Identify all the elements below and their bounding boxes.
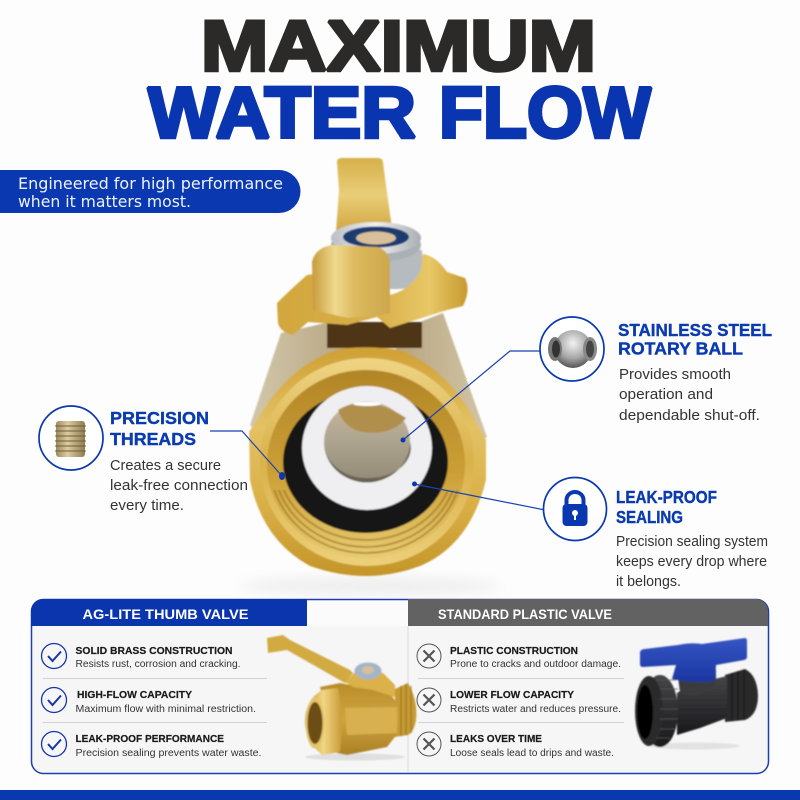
heading <box>110 408 209 449</box>
callout: stainless steel rotary ball <box>540 317 772 424</box>
header <box>408 599 768 626</box>
valve lever handle <box>336 158 392 232</box>
body <box>677 676 727 735</box>
description <box>619 366 760 424</box>
thumb block <box>312 245 390 318</box>
tagline pill: Engineered for high performance <box>18 174 283 193</box>
header: STANDARD PLASTIC VALVE <box>438 606 612 622</box>
row: plastic construction <box>417 644 621 670</box>
row: leaks: Loose seals lead to drips and waste. <box>450 748 614 759</box>
row: leak proof: LEAK-PROOF PERFORMANCE <box>76 733 224 745</box>
description: Precision sealing system <box>616 533 768 550</box>
title line: water flow: WATER <box>148 74 416 154</box>
tagline pill <box>0 170 300 213</box>
header: AG-LITE THUMB VALVE <box>82 606 248 622</box>
plastic valve product image <box>635 638 758 750</box>
title line: water flow <box>148 74 651 154</box>
row: lower flow <box>417 688 621 715</box>
description: dependable shut-off. <box>619 407 760 424</box>
row: high flow: HIGH-FLOW CAPACITY <box>77 689 192 701</box>
header <box>31 599 307 626</box>
description: it belongs. <box>616 573 681 590</box>
front threaded port <box>249 347 486 576</box>
description: keeps every drop where <box>616 553 767 570</box>
male thread end <box>725 669 758 722</box>
tagline pill: when it matters most. <box>18 192 191 211</box>
icon: threaded nipple <box>39 406 103 470</box>
icon: x <box>417 688 441 712</box>
row: plastic construction: PLASTIC CONSTRUCTION <box>450 645 578 657</box>
heading: LEAK-PROOF <box>616 487 717 507</box>
icon: steel ball <box>540 317 604 381</box>
description <box>616 533 768 590</box>
white notch above brass valve <box>307 600 408 626</box>
main brass ball valve photo <box>240 158 500 596</box>
heading <box>616 487 717 527</box>
description <box>110 457 248 514</box>
heading: PRECISION <box>110 408 209 428</box>
collar <box>345 670 395 697</box>
heading: STAINLESS STEEL <box>618 320 772 340</box>
right column: standard plastic valve <box>408 599 768 759</box>
title line: maximum: MAXIMUM <box>201 8 596 86</box>
hex body <box>320 683 398 755</box>
callout: precision threads <box>39 406 248 514</box>
black o-ring <box>283 391 448 533</box>
title line: water flow: FLOW <box>439 74 651 154</box>
row: leaks <box>417 732 614 759</box>
callout: leak-proof sealing <box>544 478 768 590</box>
icon: check <box>42 688 66 712</box>
row: leaks: LEAKS OVER TIME <box>450 733 542 745</box>
white ptfe seat <box>302 386 432 510</box>
heading <box>618 320 772 358</box>
icon: padlock <box>544 478 606 540</box>
male thread end <box>395 683 416 737</box>
callout line: sealing <box>412 482 545 510</box>
row: leak proof: Precision sealing prevents water waste. <box>76 748 262 759</box>
icon: x <box>417 732 441 756</box>
description: Provides smooth <box>619 366 731 383</box>
bottom bar <box>0 790 800 800</box>
nut <box>354 662 382 680</box>
heading: SEALING <box>616 507 683 527</box>
row: plastic construction: Prone to cracks and outdoor damage. <box>450 659 621 670</box>
description: operation and <box>619 386 713 403</box>
row: solid brass: SOLID BRASS CONSTRUCTION <box>76 645 232 657</box>
description: leak-free connection <box>110 477 248 494</box>
row: lower flow: Restricts water and reduces pressure. <box>450 704 621 715</box>
description: every time. <box>110 497 184 514</box>
row: solid brass: Resists rust, corrosion and cracking. <box>76 659 240 670</box>
row: high flow <box>42 688 256 715</box>
icon: check <box>42 732 66 756</box>
hex body side facets <box>250 313 487 480</box>
steel lock nut <box>331 222 424 289</box>
brass collar <box>277 254 468 335</box>
row: solid brass <box>42 644 240 670</box>
callout line: threads <box>210 431 285 480</box>
ball bore <box>324 402 411 482</box>
row: lower flow: LOWER FLOW CAPACITY <box>450 689 574 701</box>
union nut <box>642 675 678 747</box>
icon: check <box>42 644 66 668</box>
title: maximum water flow <box>148 8 651 154</box>
female port <box>305 688 342 755</box>
row: high flow: Maximum flow with minimal restriction. <box>76 704 256 715</box>
callout line: ball <box>400 351 546 442</box>
brass valve product image <box>267 635 416 760</box>
heading: ROTARY BALL <box>618 338 743 358</box>
row: leak proof <box>42 732 262 759</box>
blue handle <box>640 638 747 682</box>
lever <box>267 635 353 683</box>
icon: x <box>417 644 441 668</box>
comparison panel <box>31 599 768 774</box>
heading: THREADS <box>110 429 196 449</box>
description: Creates a secure <box>110 457 221 474</box>
left column: ag-lite thumb valve <box>31 599 416 760</box>
